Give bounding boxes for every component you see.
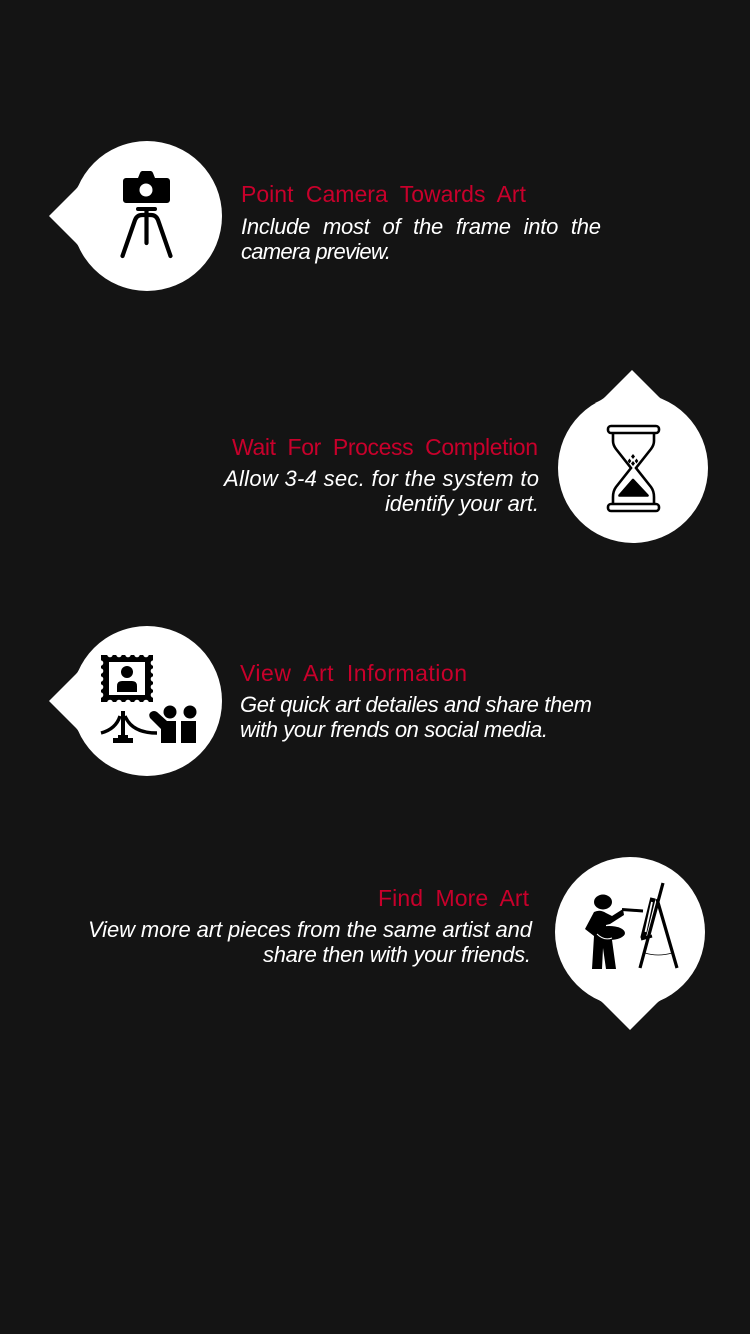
icon: painter at easel (585, 883, 677, 969)
panel: step 1 point camera (49, 141, 601, 291)
text: step 4 description (88, 917, 533, 967)
text: step 1 description: Include most of the frame into the (241, 214, 601, 239)
panel: step 2 wait for process (222, 370, 708, 543)
text: step 3 description: with your frends on social media. (240, 717, 548, 742)
text: step 1 description: camera preview. (241, 239, 391, 264)
text: step 2 heading: Wait For Process Completion (232, 434, 538, 460)
icon: hourglass (608, 426, 659, 511)
panel: step 3 view art information (49, 626, 592, 776)
text: step 3 heading: View Art Information (240, 660, 467, 686)
icon: stanchion and visitors (101, 706, 196, 743)
bubble: step 4 (555, 857, 705, 1030)
text: step 2 description: Allow 3-4 sec. for the system to (222, 466, 539, 491)
text: step 4 heading: Find More Art (378, 885, 530, 911)
bubble: step 3 (49, 626, 222, 776)
text: step 1 heading: Point Camera Towards Art (241, 181, 527, 207)
text: step 1 description (241, 214, 601, 264)
text: step 3 description (240, 692, 592, 742)
bubble: step 2 (558, 370, 708, 543)
text: step 3 description: Get quick art detailes and share them (240, 692, 592, 717)
icon: camera on tripod (122, 171, 170, 256)
text: step 4 description: share then with your friends. (263, 942, 531, 967)
text: step 2 description (222, 466, 539, 516)
panel: step 4 find more art (88, 857, 705, 1030)
text: step 2 description: identify your art. (385, 491, 539, 516)
bubble: step 1 (49, 141, 222, 291)
text: step 4 description: View more art pieces from the same artist and (88, 917, 533, 942)
icon: framed portrait (98, 652, 156, 705)
